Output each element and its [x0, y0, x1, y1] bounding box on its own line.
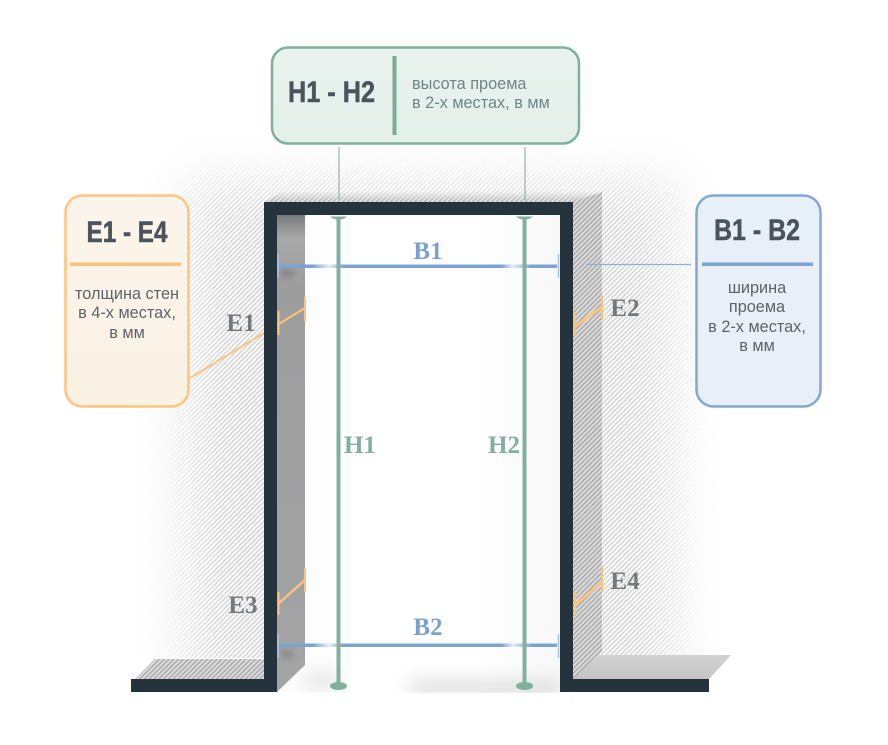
- shadow behind B2 end: [280, 649, 294, 659]
- label B1: B1: [413, 238, 443, 265]
- divider: [70, 262, 181, 266]
- floor: left: [135, 659, 264, 679]
- left inner reveal: [277, 214, 305, 692]
- opening interior: [277, 214, 560, 692]
- panel: H1 - H2 height: [272, 48, 579, 144]
- E4 measurement: [575, 566, 602, 616]
- floor shadow inside the opening: [305, 672, 560, 696]
- B1 connector: [586, 264, 691, 266]
- divider: [392, 56, 396, 135]
- hatched wall background: [164, 161, 696, 658]
- heading: B1 - B2: B1 - B2: [714, 214, 800, 247]
- E3 measurement: [278, 568, 305, 615]
- description: width: в 2-х местах,: [708, 318, 806, 336]
- label E1: E1: [226, 310, 256, 337]
- heading: E1 - E4: E1 - E4: [86, 216, 168, 249]
- label B2: B2: [413, 614, 443, 641]
- description: width: ширина: [728, 279, 787, 297]
- door frame outline: [131, 202, 709, 692]
- description: height: в 2-х местах, в мм: [412, 94, 550, 112]
- description: thickness: в 4-х местах,: [78, 304, 176, 322]
- top reveal of the opening: [264, 192, 602, 203]
- panel: E1 - E4 wall thickness: [66, 196, 188, 406]
- door opening measurement infographic: [64, 46, 822, 693]
- label E2: E2: [610, 295, 640, 322]
- E1 measurement: [190, 297, 305, 378]
- shadow behind B1 end: [279, 268, 295, 278]
- H1 connector: [338, 147, 340, 200]
- description: thickness: толщина стен: [75, 285, 179, 303]
- H2 dimension line: [516, 216, 533, 690]
- right outer reveal: [573, 192, 602, 679]
- B1 dimension line: [278, 254, 558, 278]
- description: thickness: в мм: [109, 324, 145, 342]
- description: height: высота проема: [412, 75, 527, 93]
- E2 measurement: [574, 296, 602, 336]
- description: width: проема: [729, 298, 786, 316]
- panel: B1 - B2 width: [696, 196, 820, 406]
- H2 connector: [524, 147, 526, 200]
- B2 dimension line: [278, 634, 558, 658]
- label H2: H2: [488, 432, 520, 459]
- H1 dimension line: [330, 216, 347, 690]
- floor: right: [573, 655, 731, 679]
- heading: H1 - H2: H1 - H2: [288, 76, 375, 109]
- description: width: в мм: [739, 337, 775, 355]
- label E3: E3: [228, 592, 258, 619]
- label E4: E4: [610, 568, 640, 595]
- divider: [702, 262, 813, 266]
- label H1: H1: [344, 432, 376, 459]
